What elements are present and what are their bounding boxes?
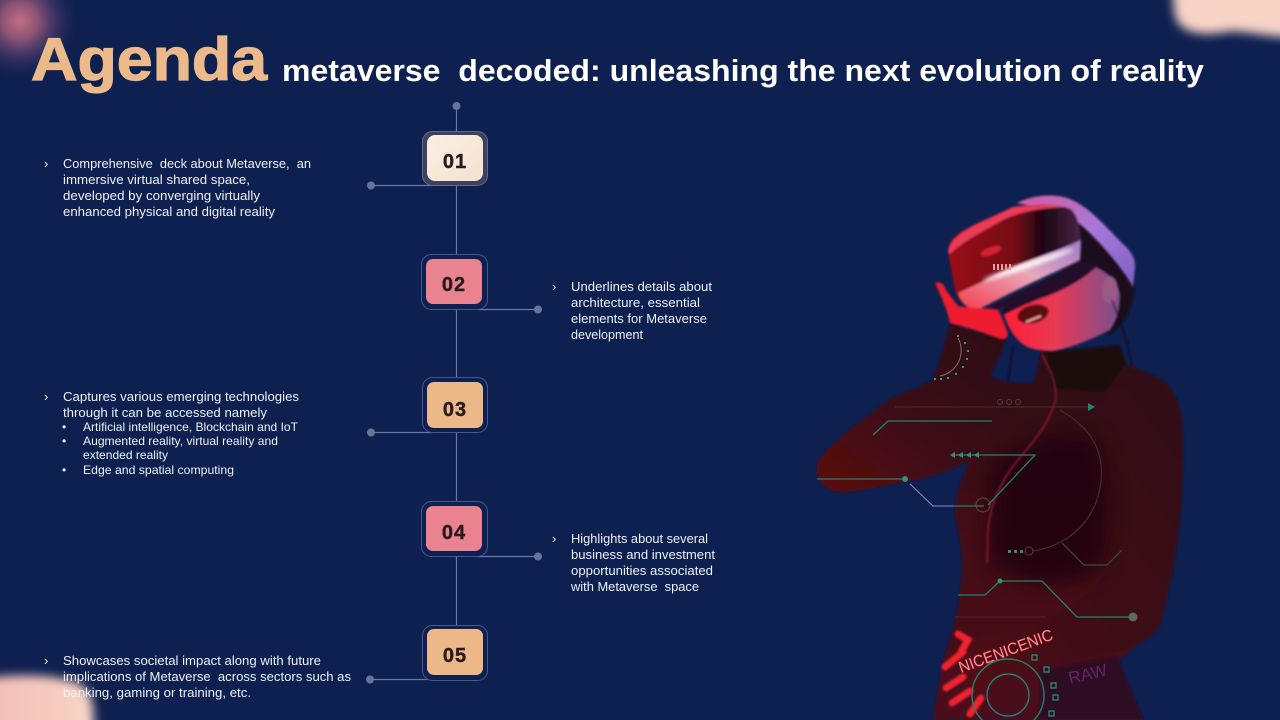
decorative blob: bottom left — [0, 676, 94, 720]
text block: item 03: • — [62, 463, 66, 477]
torso and neck — [933, 345, 1183, 720]
headset body — [948, 205, 1081, 310]
headset strap — [1017, 195, 1135, 287]
text block: item 05: Showcases societal impact along with future — [63, 653, 321, 668]
headset lower rim — [958, 240, 1081, 311]
hair behind headset — [1060, 210, 1134, 335]
badge 05: 05 — [443, 645, 467, 667]
turtleneck shading — [1046, 345, 1126, 392]
badge 01 — [422, 132, 488, 186]
hand fingers — [935, 282, 1008, 339]
text block: item 03: • — [62, 420, 66, 434]
subtitle: metaverse decoded: unleashing the next evolution of reality — [282, 53, 1205, 88]
text block: item 02: architecture, essential — [571, 295, 700, 310]
text block: item 04: Highlights about several — [571, 531, 708, 546]
text block: item 02: elements for Metaverse — [571, 311, 707, 326]
lens flare — [982, 247, 1074, 283]
badge 02 — [422, 254, 488, 310]
lens display marks — [993, 264, 1011, 270]
text block: item 05: › — [44, 653, 48, 668]
lower hand fingers — [945, 634, 981, 714]
text block: item 05 — [44, 653, 352, 700]
lens reflection — [979, 243, 1003, 259]
text block: item 03: • — [62, 434, 66, 448]
text block: item 03: Edge and spatial computing — [83, 463, 234, 477]
connector: item 02 — [478, 306, 542, 314]
text block: item 04: business and investment — [571, 547, 715, 562]
badge 04: 04 — [442, 522, 466, 544]
text block: item 04 — [552, 531, 715, 594]
text block: item 03: Augmented reality, virtual reality and — [83, 434, 278, 448]
visor gap — [992, 306, 1004, 322]
under-visor shadow — [985, 262, 1100, 317]
text block: item 05: banking, gaming or training, etc. — [63, 685, 251, 700]
circuit lines — [817, 400, 1138, 720]
connector: item 04 — [478, 552, 542, 560]
badge 03 — [422, 378, 488, 432]
text block: item 03: Artificial intelligence, Blockchain and IoT — [83, 420, 299, 434]
timeline spine — [452, 102, 460, 628]
earphone wires — [1008, 300, 1132, 382]
connector: item 01 — [367, 182, 432, 190]
text block: item 01 — [44, 156, 311, 219]
face — [1003, 264, 1120, 351]
wrist dial dots — [934, 335, 969, 380]
text block: item 03: through it can be accessed namely — [63, 405, 267, 420]
projected sleeve text: NICENICENIC — [957, 627, 1055, 677]
text block: item 05: implications of Metaverse across sectors such as — [63, 669, 352, 684]
title word: Agenda: Agenda — [31, 26, 268, 93]
badge 05 — [422, 626, 488, 680]
connector: item 05 — [366, 676, 432, 684]
ear — [1102, 276, 1118, 304]
raised left arm — [817, 323, 1033, 492]
text block: item 03: extended reality — [83, 448, 168, 462]
decorative glow: top left — [0, 0, 82, 83]
badge 01: 01 — [443, 151, 467, 173]
neck wire — [987, 355, 1056, 563]
text block: item 01: developed by converging virtually — [63, 188, 261, 203]
right arm — [960, 381, 1183, 692]
text block: item 03 — [44, 389, 300, 477]
text block: item 03: › — [44, 389, 48, 404]
mouth highlight — [1026, 316, 1041, 322]
wrist dial — [940, 338, 961, 376]
lower body shading — [1040, 656, 1143, 720]
text block: item 01: immersive virtual shared space, — [63, 172, 250, 187]
text block: item 04: › — [552, 531, 556, 546]
badge 03: 03 — [443, 399, 467, 421]
title — [31, 26, 1205, 93]
lips — [1015, 301, 1051, 327]
inner body shadow — [990, 434, 1110, 584]
text block: item 04: opportunities associated — [571, 563, 713, 578]
headset top rim — [948, 205, 1066, 254]
badge 02: 02 — [442, 274, 466, 296]
text block: item 02: development — [571, 327, 643, 342]
text block: item 01: Comprehensive deck about Metaverse, an — [63, 156, 311, 171]
badge 04 — [422, 502, 488, 556]
projected waist text: RAW — [1067, 661, 1109, 688]
text block: item 02 — [552, 279, 712, 342]
decorative blob: top right — [1170, 0, 1280, 38]
text block: item 01: › — [44, 156, 48, 171]
text block: item 03: Captures various emerging technologies — [63, 389, 300, 404]
text block: item 02: › — [552, 279, 556, 294]
illustration: woman wearing VR headset — [817, 195, 1183, 720]
text block: item 01: enhanced physical and digital reality — [63, 204, 276, 219]
connector: item 03 — [367, 428, 432, 436]
text block: item 04: with Metaverse space — [570, 579, 699, 594]
text block: item 02: Underlines details about — [571, 279, 712, 294]
